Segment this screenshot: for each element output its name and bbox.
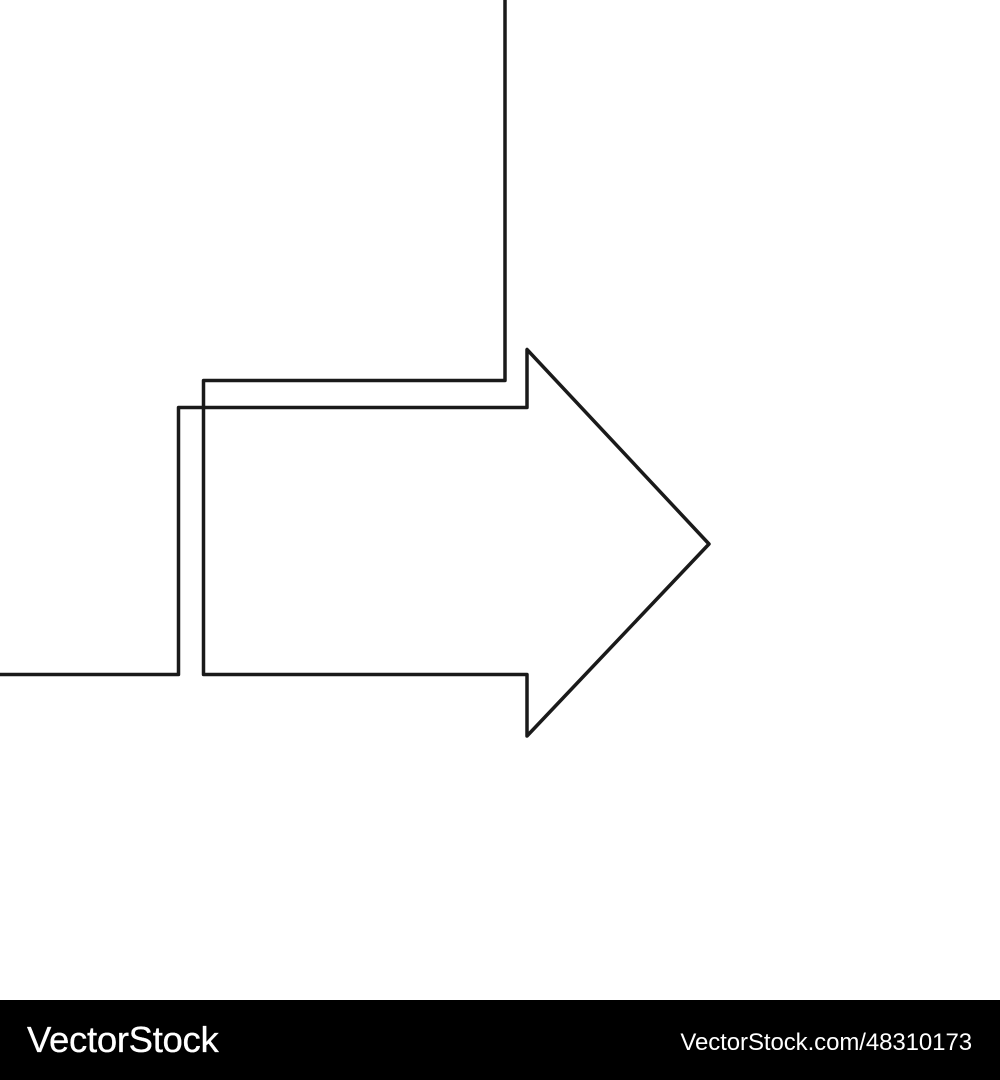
image id: VectorStock.com/48310173 (680, 1029, 972, 1056)
footer bar (0, 1000, 1000, 1080)
brand name: VectorStock (27, 1019, 218, 1060)
arrow line (0, 0, 709, 736)
